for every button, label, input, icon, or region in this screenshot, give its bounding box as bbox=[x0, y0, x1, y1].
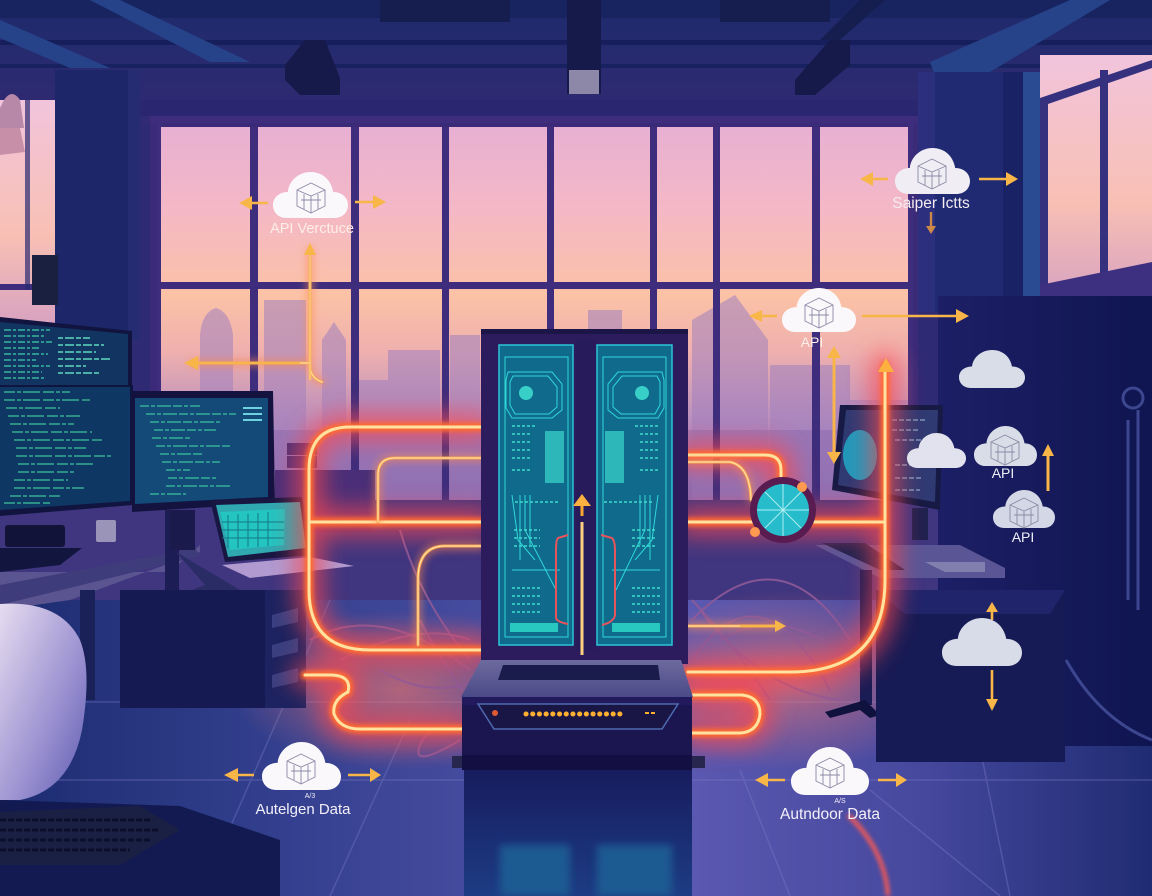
teal disc hub bbox=[750, 477, 816, 543]
arrow: double vertical bbox=[827, 346, 841, 464]
monitor stand bbox=[170, 510, 195, 550]
left window and column bbox=[0, 70, 140, 340]
office chair bbox=[0, 604, 87, 800]
large code monitor bbox=[0, 385, 133, 516]
left desk with monitors bbox=[0, 317, 275, 700]
arrows: bottom right cloud bbox=[755, 773, 907, 787]
cloud: plain on monitor bbox=[907, 433, 966, 468]
right circuit panel bbox=[597, 345, 672, 645]
cloud: API Verctuce: API Verctuce bbox=[270, 221, 354, 237]
right monitor bbox=[832, 405, 943, 510]
arrows: cloud 2 bbox=[860, 172, 1018, 234]
desk surface bbox=[0, 545, 200, 610]
central server cabinet bbox=[481, 329, 688, 664]
tangled cables bbox=[310, 530, 860, 756]
cloud: plain upper bbox=[959, 350, 1025, 388]
cloud: Saiper Ictts: Saiper Ictts bbox=[892, 195, 970, 212]
floor bbox=[0, 590, 1152, 896]
middle code monitor bbox=[132, 391, 275, 512]
arrow: glowing vertical head bbox=[878, 358, 894, 372]
floor reflection of server bbox=[464, 770, 888, 896]
laptop bbox=[176, 497, 354, 595]
main window with sunset sky bbox=[150, 116, 918, 506]
server base unit bbox=[452, 660, 705, 770]
cloud: API Verctuce bbox=[270, 172, 354, 237]
cloud: Autndoor Data: A/S bbox=[834, 798, 846, 805]
right desk with monitor bbox=[815, 405, 1005, 718]
foreground desk with keyboard bbox=[0, 800, 280, 896]
back stack of boxes bbox=[275, 443, 375, 532]
cloud: API right two bbox=[993, 490, 1055, 545]
cloud: Autelgen Data: Autelgen Data bbox=[255, 801, 351, 818]
keyboard and desk accessories bbox=[0, 520, 116, 572]
cloud: API right one: API bbox=[992, 465, 1014, 481]
cloud: large plain bbox=[942, 618, 1022, 666]
arrows: large cloud up and down bbox=[986, 602, 998, 711]
arrow: left branch bbox=[184, 356, 300, 370]
cloud: API right two: API bbox=[1012, 529, 1034, 545]
cloud: API center: API bbox=[801, 334, 823, 350]
cloud: API center bbox=[782, 288, 856, 350]
city skyline bbox=[200, 295, 908, 500]
file cabinet left bbox=[120, 590, 306, 708]
arrow: right panel up bbox=[1042, 444, 1054, 491]
left circuit panel bbox=[499, 345, 573, 645]
dark wall panel on the right bbox=[938, 296, 1152, 746]
status lights bbox=[526, 712, 622, 716]
arrow: bottom branch right bbox=[740, 620, 786, 632]
arrow: API Verctuce up bbox=[304, 243, 316, 380]
file cabinet right bbox=[876, 590, 1065, 762]
cloud: Autndoor Data bbox=[780, 747, 880, 823]
cloud: Autndoor Data: Autndoor Data bbox=[780, 806, 880, 823]
cloud: API right one bbox=[974, 426, 1037, 481]
red loops on server bbox=[556, 535, 615, 625]
arrows: cloud 3 bbox=[749, 309, 969, 323]
cloud: Autelgen Data bbox=[255, 742, 351, 818]
right window and column bbox=[918, 55, 1152, 312]
arrows: bottom left cloud bbox=[224, 768, 381, 782]
yellow arrows bbox=[184, 172, 1054, 787]
upper monitor bbox=[0, 317, 132, 386]
arrows: cloud 1 bbox=[239, 195, 386, 210]
glowing thin data lines bbox=[192, 250, 778, 645]
lower wall band bbox=[0, 500, 1152, 605]
glowing thick data lines bbox=[305, 365, 885, 733]
cloud: Autelgen Data: A/3 bbox=[305, 793, 315, 800]
cloud: Saiper Ictts bbox=[892, 148, 970, 212]
center data line with arrow bbox=[573, 494, 591, 655]
ceiling lights bbox=[285, 0, 850, 95]
